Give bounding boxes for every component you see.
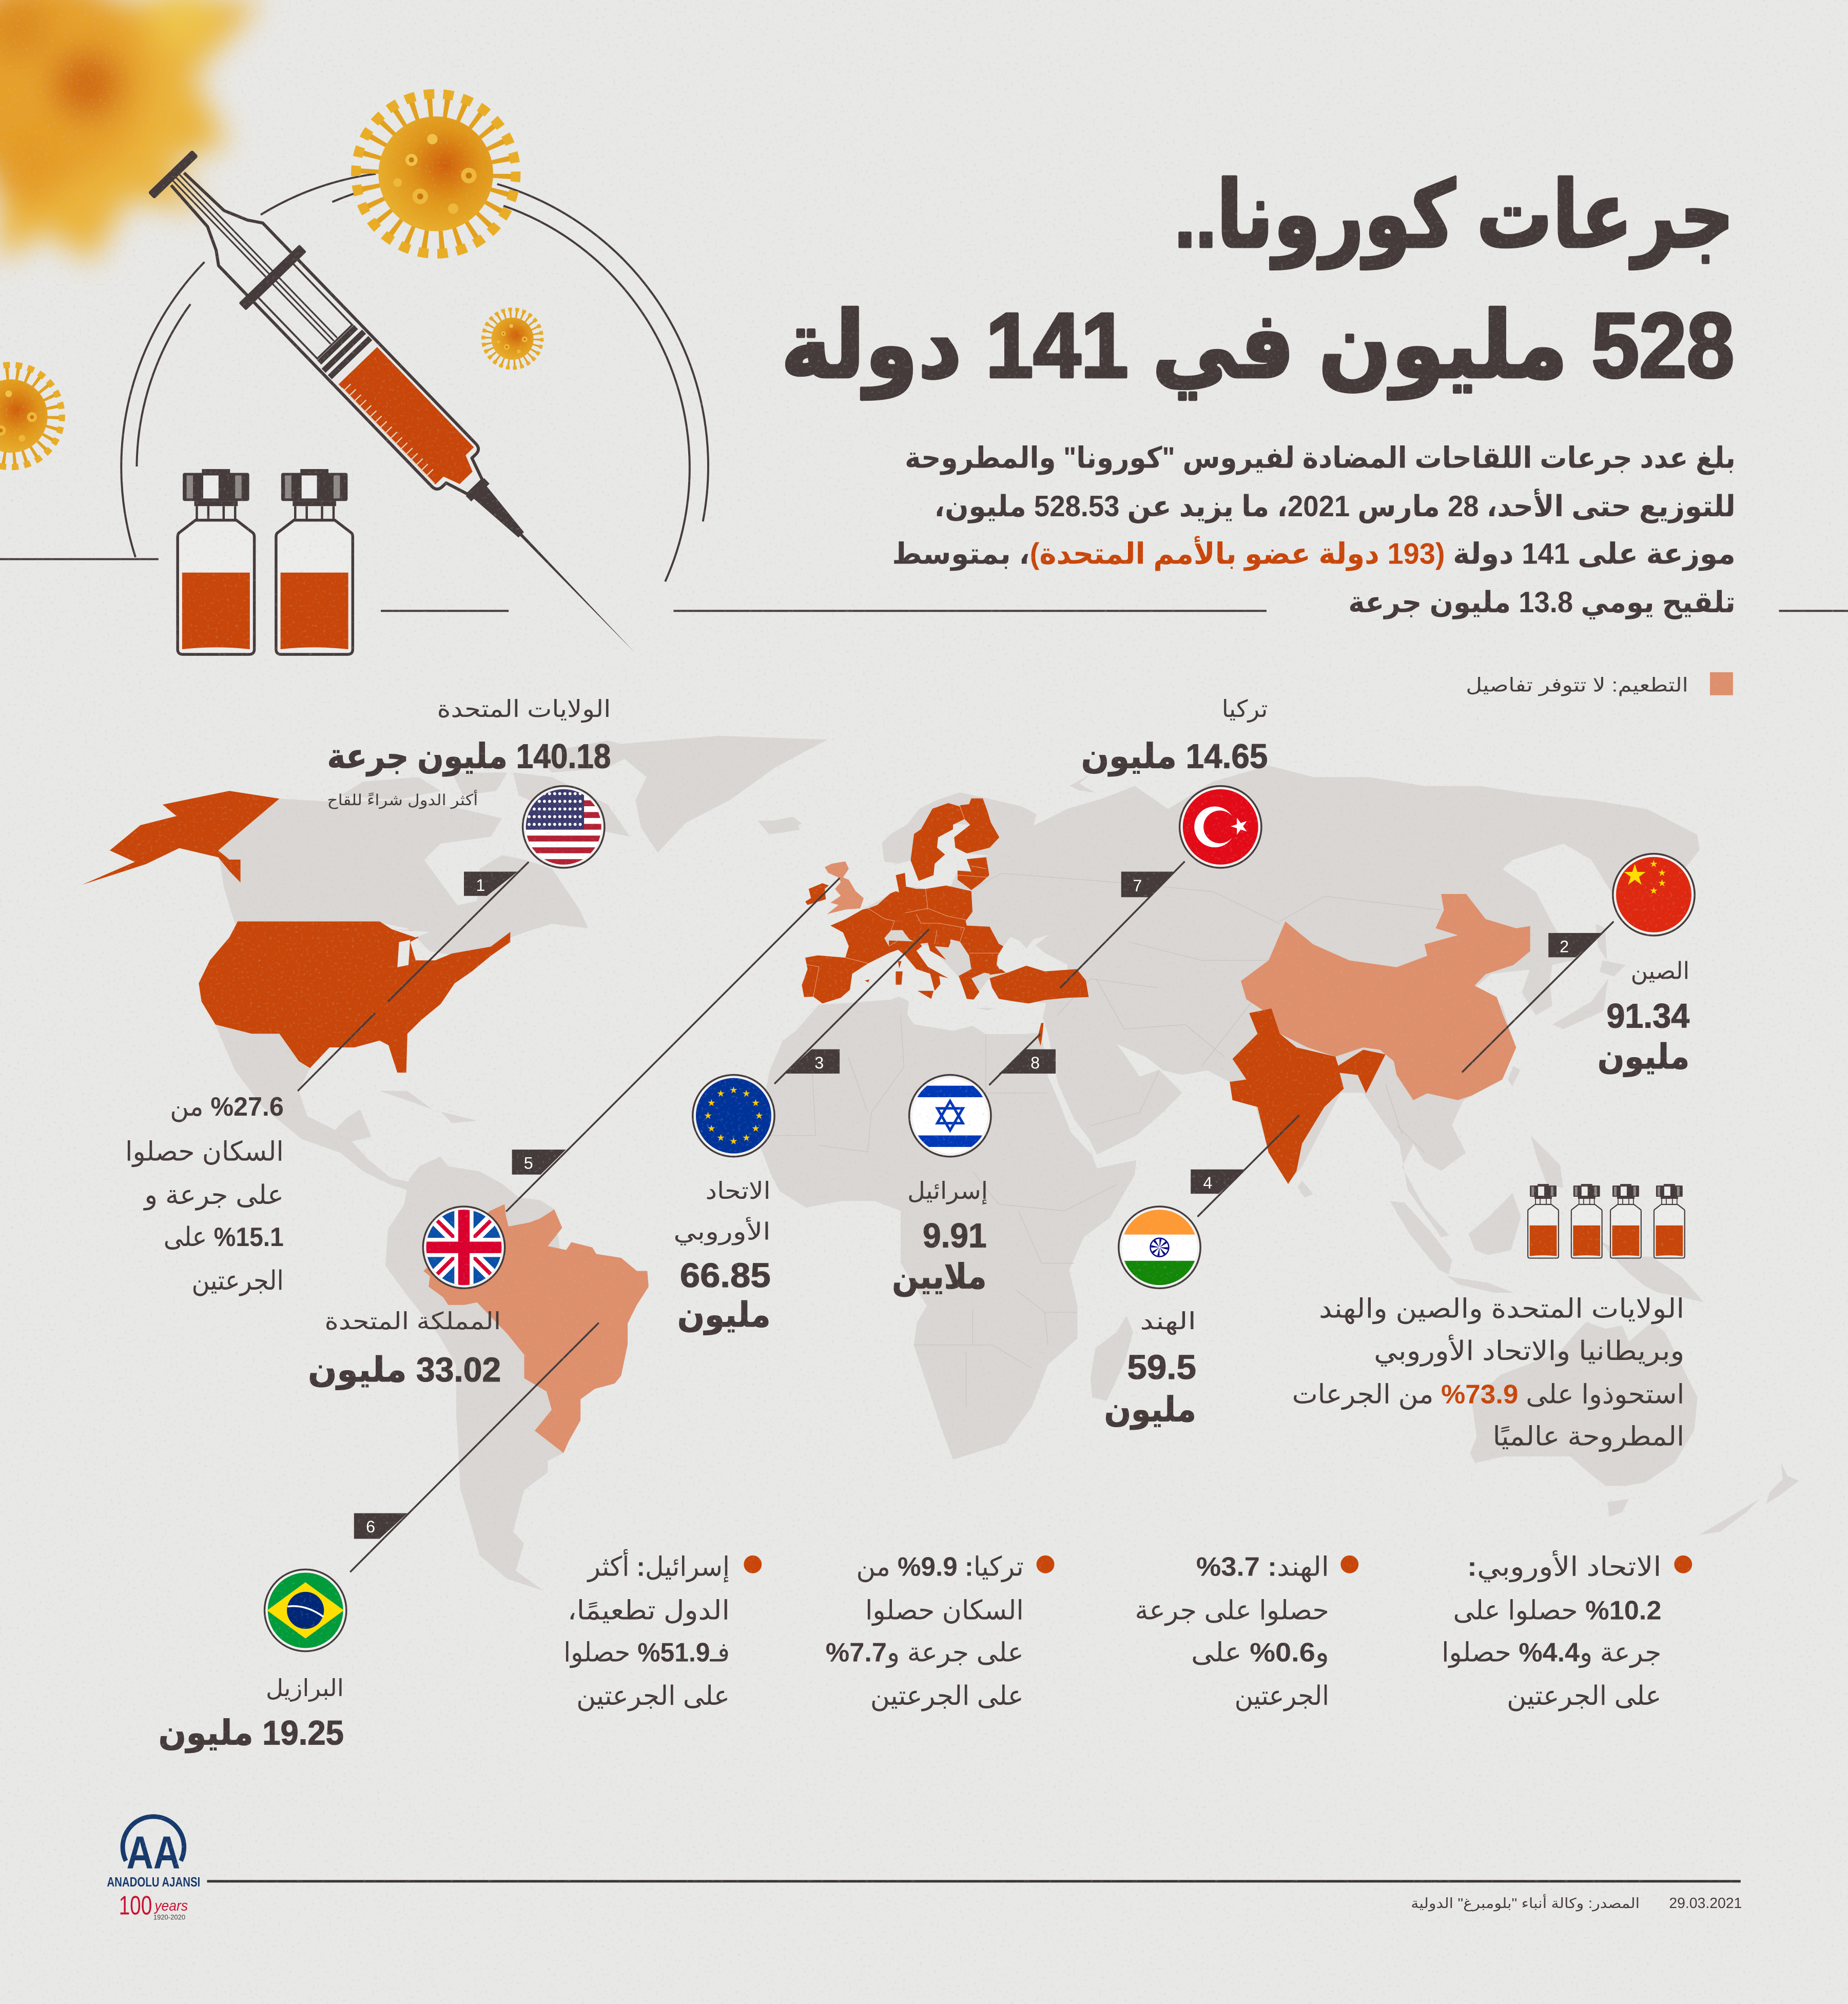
map: africa and middle east borders [770, 1015, 1159, 1407]
intro paragraph [892, 441, 1736, 619]
map: united kingdom [825, 862, 864, 914]
map: africa [760, 997, 1136, 1460]
map: southeast asia and oceania [1390, 1136, 1799, 1535]
label: european union [673, 1177, 771, 1335]
leader line 8 [989, 1034, 1040, 1085]
flag: china [1613, 854, 1695, 936]
logo: anadolu agency: years [153, 1898, 188, 1914]
tag 8 [999, 1049, 1056, 1074]
tag 2: 2 [1560, 937, 1569, 956]
map: mexico and central america [216, 1024, 413, 1192]
text block: five largest share: المطروحة عالميًا [1493, 1422, 1684, 1452]
intro paragraph: تلقيح يومي 13.8 مليون جرعة [1348, 586, 1736, 619]
virus small [483, 309, 542, 368]
label: united kingdom: 33.02 مليون [308, 1351, 501, 1390]
label: india [1104, 1308, 1196, 1430]
bullet: european union: %10.2 حصلوا على [1453, 1596, 1661, 1626]
logo: anadolu agency [107, 1817, 200, 1921]
illustration lines [0, 559, 1848, 611]
tag 1 [464, 871, 518, 896]
text block: united states coverage [125, 1092, 284, 1296]
label: united states: 140.18 مليون جرعة [327, 737, 611, 777]
map: south america [385, 1157, 569, 1591]
leader line 7 [1060, 862, 1185, 988]
text block: united states coverage: %27.6 من [170, 1092, 284, 1122]
logo: anadolu agency: 100 [119, 1891, 152, 1921]
flag: united kingdom [423, 1207, 505, 1288]
label: turkey: 14.65 مليون [1081, 737, 1268, 777]
map: india [1230, 1008, 1386, 1184]
tag 2 [1548, 933, 1603, 957]
small vials [1528, 1184, 1685, 1258]
map: australia [1470, 1322, 1698, 1486]
label: israel: إسرائيل [907, 1177, 988, 1205]
flag: india [1119, 1207, 1200, 1288]
label: turkey: تركيا [1222, 695, 1268, 723]
label: brazil: البرازيل [266, 1675, 344, 1702]
text block: united states coverage: الجرعتين [192, 1266, 284, 1296]
bullet: turkey: تركيا: ‎%9.9 من [857, 1552, 1024, 1583]
title [781, 164, 1734, 400]
map: greenland and arctic [216, 736, 827, 1192]
map: canada [218, 799, 588, 956]
flag: israel [909, 1075, 991, 1157]
title: 528 مليون في 141 دولة [781, 294, 1734, 400]
flag: turkey [1180, 786, 1261, 868]
bullet: israel: إسرائيل: أكثر [587, 1549, 730, 1583]
map: madagascar [1091, 1316, 1133, 1400]
bullet: european union: الاتحاد الأوروبي: [1467, 1550, 1661, 1583]
tag 4: 4 [1203, 1174, 1212, 1192]
tag 1: 1 [476, 876, 485, 894]
tag 7: 7 [1133, 877, 1142, 895]
label: united states: أكثر الدول شراءً للقاح [327, 789, 478, 809]
vial right [276, 469, 353, 654]
leader line 3 [774, 929, 929, 1084]
map: alaska [82, 791, 510, 1073]
flag: brazil [264, 1569, 346, 1651]
label: turkey [1081, 695, 1268, 777]
map: european union and turkey [802, 799, 1088, 1046]
bullet: india: حصلوا على جرعة [1135, 1596, 1329, 1626]
leader line 5 [506, 878, 840, 1212]
bullet: india [1135, 1552, 1358, 1711]
map: israel [1038, 1023, 1043, 1046]
source: المصدر: وكالة أنباء "بلومبرغ" الدولية [1411, 1894, 1640, 1912]
syringe [140, 142, 665, 682]
text block: five largest share [1292, 1294, 1684, 1452]
footer rule [207, 1881, 1741, 1882]
label: european union: الاتحاد [706, 1177, 771, 1204]
bullet: turkey [826, 1552, 1055, 1711]
intro paragraph: للتوزيع حتى الأحد، 28 مارس 2021، ما يزيد عن 528.53 مليون، [934, 488, 1736, 523]
tag 6: 6 [366, 1517, 375, 1536]
bullet: european union: جرعة و‎%4.4 حصلوا [1442, 1638, 1661, 1668]
map: switzerland [884, 930, 905, 941]
leader line 6 [350, 1323, 599, 1572]
tag 8: 8 [1030, 1054, 1040, 1072]
bullet: israel: الدول تطعيمًا، [568, 1596, 730, 1626]
label: brazil: 19.25 مليون [159, 1714, 344, 1753]
bullet: turkey: على جرعة و‎%7.7 [826, 1638, 1024, 1668]
label: european union: 66.85 [680, 1256, 771, 1295]
bullet: israel: على الجرعتين [576, 1681, 730, 1711]
map: brazil [423, 1204, 649, 1453]
bullet: india: و‎%0.6 على [1191, 1638, 1329, 1668]
label: china: 91.34 [1606, 997, 1690, 1035]
label: israel: ملايين [892, 1257, 987, 1297]
label: china: الصين [1631, 958, 1689, 985]
text block: united states coverage: على جرعة و [143, 1180, 284, 1211]
text block: five largest share: استحوذوا على ‎%73.9 من الجرعات [1292, 1379, 1684, 1410]
intro paragraph: موزعة على 141 دولة (193 دولة عضو بالأمم المتحدة)، بمتوسط [892, 535, 1736, 571]
tag 3 [785, 1049, 840, 1074]
label: united states [327, 695, 611, 809]
bullet: turkey: السكان حصلوا [865, 1596, 1024, 1626]
tag 4 [1191, 1170, 1246, 1194]
virus large [356, 94, 516, 254]
flag: european union [693, 1075, 774, 1157]
label: india: الهند [1140, 1308, 1196, 1335]
label: brazil [159, 1675, 344, 1753]
label: india: 59.5 [1127, 1348, 1196, 1387]
blurred virus top left [0, 0, 262, 262]
text block: five largest share: وبريطانيا والاتحاد الأوروبي [1374, 1334, 1684, 1367]
label: united kingdom: المملكة المتحدة [325, 1308, 501, 1334]
map: black sea [997, 935, 1067, 972]
text block: united states coverage: السكان حصلوا [125, 1137, 284, 1167]
label: israel: 9.91 [923, 1217, 987, 1255]
bullet: israel [563, 1549, 762, 1711]
illustration: arcs [121, 174, 708, 581]
label: israel [892, 1177, 988, 1297]
world map [82, 736, 1799, 1591]
bullet: israel: فـ‎%51.9 حصلوا [563, 1638, 730, 1668]
map: great lakes [392, 929, 430, 967]
legend [1466, 672, 1733, 696]
virus left [0, 365, 62, 467]
flag: united states [523, 786, 605, 868]
map: europe islands [770, 774, 1095, 1010]
legend: التطعيم: لا تتوفر تفاصيل [1466, 674, 1688, 696]
map: eurasia [845, 766, 1700, 1237]
label: united states: الولايات المتحدة [437, 695, 611, 723]
tag 7 [1121, 871, 1174, 897]
logo: anadolu agency: 1920-2020 [153, 1914, 185, 1921]
intro paragraph: بلغ عدد جرعات اللقاحات المضادة لفيروس "كورونا" والمطروحة [905, 441, 1736, 475]
bullet: turkey: على الجرعتين [870, 1681, 1024, 1711]
map: asia islands [1297, 924, 1626, 1198]
vial left [178, 469, 255, 654]
title: جرعات كورونا.. [1175, 164, 1734, 270]
map: inner european borders [806, 803, 999, 997]
leader line 1 [298, 862, 529, 1091]
label: european union: الأوروبي [673, 1217, 771, 1246]
label: united kingdom [308, 1308, 501, 1390]
date: 29.03.2021 [1669, 1895, 1742, 1912]
label: china [1598, 958, 1690, 1077]
tag 5 [512, 1150, 566, 1175]
logo: anadolu agency: AA [127, 1827, 180, 1878]
map: china [1241, 894, 1530, 1100]
logo: anadolu agency: ANADOLU AJANSI [107, 1874, 200, 1890]
text block: five largest share: الولايات المتحدة والصين والهند [1319, 1294, 1684, 1325]
leader line 2 [1462, 922, 1613, 1072]
label: india: مليون [1104, 1390, 1196, 1430]
tag 5: 5 [524, 1154, 533, 1173]
bullet: india: الهند: ‎%3.7 [1196, 1552, 1329, 1583]
bullet: european union [1442, 1550, 1692, 1711]
bullet: european union: على الجرعتين [1507, 1681, 1661, 1711]
map: united states [199, 922, 510, 1073]
label: european union: مليون [677, 1296, 771, 1335]
leader line 4 [1197, 1115, 1299, 1217]
tag 6 [354, 1513, 407, 1539]
tag 3: 3 [814, 1054, 824, 1072]
text block: united states coverage: %15.1 على [164, 1222, 284, 1252]
bullet: india: الجرعتين [1235, 1681, 1329, 1711]
label: china: مليون [1598, 1038, 1689, 1077]
